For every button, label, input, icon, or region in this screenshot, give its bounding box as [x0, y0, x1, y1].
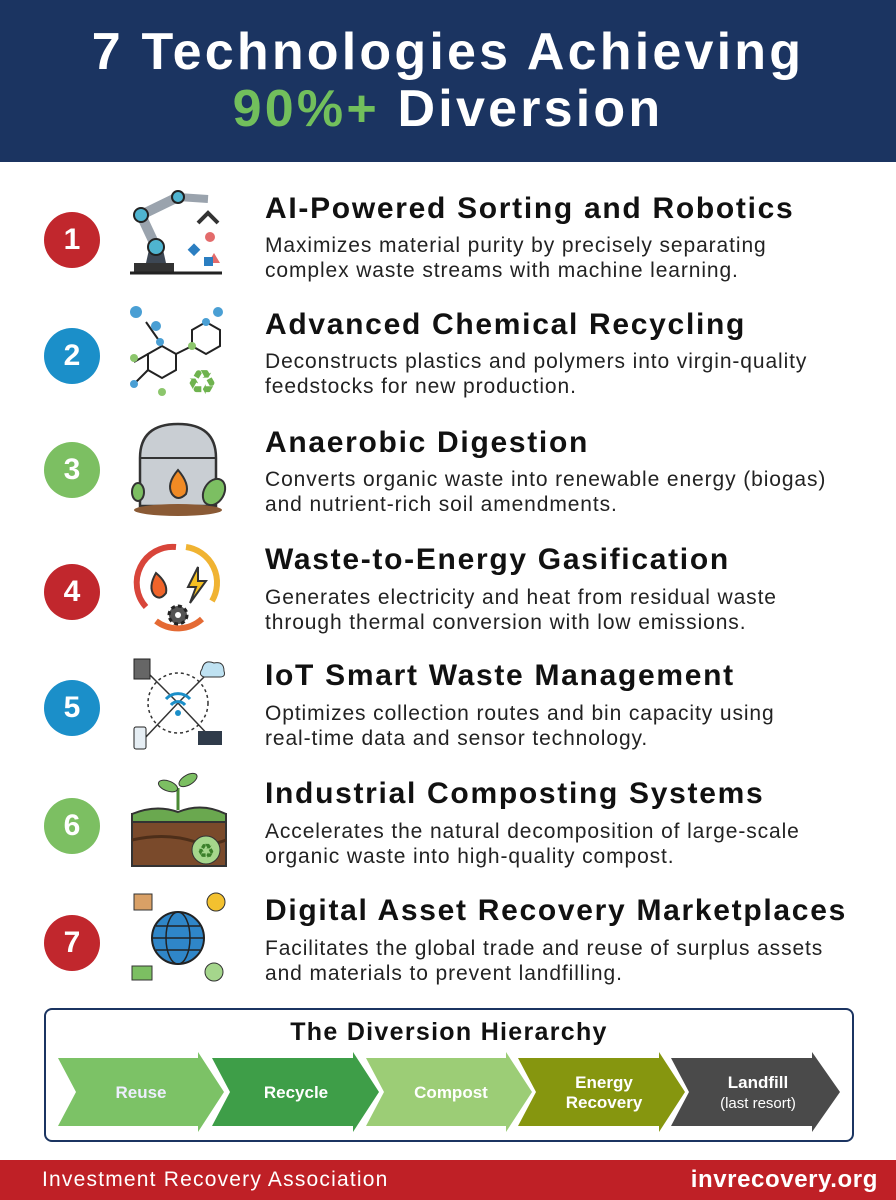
title 3: Anaerobic Digestion [265, 426, 589, 459]
icon: digester [131, 422, 226, 516]
badge 7 [44, 915, 100, 971]
icon: molecules: ♻ [187, 364, 217, 402]
desc 7 [265, 937, 823, 985]
icon: globe marketplace [132, 892, 226, 982]
item 4 [44, 543, 777, 634]
desc 5: real-time data and sensor technology. [265, 727, 648, 750]
item 1 [44, 190, 794, 282]
hierarchy arrows [58, 1052, 840, 1132]
hierarchy arrows: Landfill [728, 1073, 788, 1092]
panel: diversion hierarchy [44, 1008, 854, 1142]
item 7 [44, 892, 847, 985]
desc 2: Deconstructs plastics and polymers into virgin-quality [265, 350, 807, 373]
badge 4: 4 [64, 575, 80, 608]
title 2: Advanced Chemical Recycling [265, 308, 746, 341]
title 1: AI-Powered Sorting and Robotics [265, 192, 794, 225]
desc 3: Converts organic waste into renewable energy (biogas) [265, 468, 826, 491]
badge 3 [44, 442, 100, 498]
title 5: IoT Smart Waste Management [265, 659, 735, 692]
badge 1: 1 [64, 223, 80, 256]
hierarchy arrows: Compost [414, 1083, 488, 1102]
header: 7 Technologies Achieving [92, 23, 804, 81]
icon: molecules [130, 306, 223, 402]
footer [0, 1160, 896, 1200]
badge 6: 6 [64, 809, 80, 842]
badge 2: 2 [64, 339, 80, 372]
icon: IoT network [134, 658, 225, 750]
desc 1: complex waste streams with machine learning. [265, 259, 739, 282]
badge 5 [44, 680, 100, 736]
title 6: Industrial Composting Systems [265, 777, 764, 810]
desc 5 [265, 702, 775, 750]
hierarchy arrows: Energy [575, 1073, 633, 1092]
item 3 [44, 422, 826, 516]
item 5 [44, 658, 775, 750]
desc 7: Facilitates the global trade and reuse of surplus assets [265, 937, 823, 960]
title 4: Waste-to-Energy Gasification [265, 543, 730, 576]
badge 1 [44, 212, 100, 268]
hierarchy arrows: Reuse [115, 1083, 167, 1102]
badge 4 [44, 564, 100, 620]
header: 90%+ Diversion [233, 80, 663, 138]
desc 2: feedstocks for new production. [265, 375, 577, 398]
desc 3 [265, 468, 826, 516]
desc 4 [265, 586, 777, 634]
hierarchy arrows: Recovery [566, 1093, 643, 1112]
desc 4: through thermal conversion with low emissions. [265, 611, 746, 634]
icon: energy cycle [134, 544, 220, 632]
desc 4: Generates electricity and heat from residual waste [265, 586, 777, 609]
hierarchy arrows: (last resort) [720, 1095, 796, 1112]
title 7: Digital Asset Recovery Marketplaces [265, 894, 847, 927]
desc 6 [265, 820, 800, 868]
desc 7: and materials to prevent landfilling. [265, 962, 623, 985]
icon: robot arm [130, 190, 222, 274]
desc 3: and nutrient-rich soil amendments. [265, 493, 618, 516]
desc 6: organic waste into high-quality compost. [265, 845, 675, 868]
desc 5: Optimizes collection routes and bin capacity using [265, 702, 775, 725]
desc 1: Maximizes material purity by precisely separating [265, 234, 767, 257]
hierarchy arrows: Recycle [264, 1083, 328, 1102]
badge 5: 5 [64, 691, 80, 724]
badge 3: 3 [64, 453, 80, 486]
desc 6: Accelerates the natural decomposition of large-scale [265, 820, 800, 843]
footer: invrecovery.org [691, 1166, 878, 1193]
icon: compost soil [131, 772, 227, 867]
header [0, 0, 896, 162]
badge 7: 7 [64, 926, 80, 959]
icon: compost soil: ♻ [197, 841, 215, 863]
desc 1 [265, 234, 767, 282]
badge 2 [44, 328, 100, 384]
hierarchy heading: The Diversion Hierarchy [290, 1018, 608, 1046]
item 2 [44, 306, 807, 402]
item 6 [44, 772, 800, 868]
desc 2 [265, 350, 807, 398]
footer: Investment Recovery Association [42, 1168, 389, 1191]
badge 6 [44, 798, 100, 854]
